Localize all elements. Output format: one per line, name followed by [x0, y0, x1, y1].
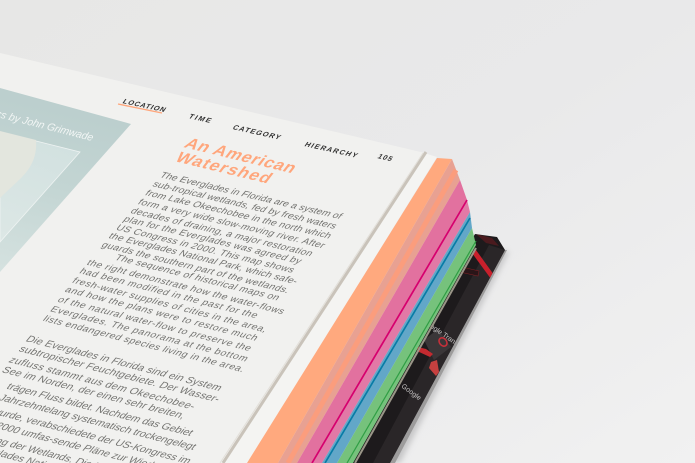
second book underneath with black cover [340, 234, 509, 463]
nav: hierarchy: HIERARCHY [303, 140, 360, 159]
heading: Watershed [172, 149, 276, 187]
English body text: the right demonstrate how the water-flows [84, 258, 287, 317]
page edges stack with colour bands [223, 153, 476, 463]
German body text: Die Everglades in Florida sind ein System [23, 334, 225, 393]
English body text: US Congress in 2000. This map shows [113, 223, 297, 275]
cover label: Google: Google [400, 383, 422, 402]
English body text: sub-tropical wetlands, fed by fresh waters [150, 180, 339, 231]
heading: An American [181, 135, 301, 176]
icon: dark tile with red shapes [417, 329, 451, 376]
German body text [0, 334, 225, 463]
English body text: had been modified in the past for the [77, 267, 261, 321]
map land area [0, 131, 36, 198]
book photo scene [0, 88, 510, 463]
navigation header [118, 97, 395, 163]
English body text: The sequence of historical maps on [112, 253, 282, 303]
German body text: Jahrzehntelang systematisch trockengelegt [0, 393, 199, 452]
English body text: lists endangered species living in the area. [40, 314, 247, 374]
page gutter edge [220, 152, 426, 463]
English body text: fresh-water supplies of cities in the area, [69, 276, 270, 335]
open book page [0, 53, 425, 463]
icon: small cover label box [460, 267, 479, 276]
page number: 105 [376, 152, 395, 163]
German body text: zufluss stammt aus dem Okeechobee- [6, 355, 199, 412]
English body text: form a very wide slow-moving river. After [135, 198, 328, 251]
nav: time: TIME [187, 112, 214, 125]
English body text: from Lake Okeechobee in the north which [142, 189, 334, 241]
English body text: decades of draining, a major restoration [128, 207, 315, 259]
nav: location underline [118, 104, 162, 113]
map panel [0, 88, 131, 272]
English body text: and how the plans were to restore much [62, 285, 260, 343]
English body text: plan for the Everglades was agreed by [121, 215, 304, 266]
map inset [0, 132, 80, 242]
nav: category: CATEGORY [231, 123, 283, 141]
English body text [40, 171, 345, 374]
nav: location: LOCATION [121, 97, 168, 114]
English body text: of the natural water-flow to preserve the [55, 295, 254, 353]
English body text: Everglades. The panorama at the bottom [48, 305, 251, 364]
German body text: See im Norden, der einen sehr breiten, [0, 365, 188, 421]
German body text: trägen Fluss bildet. Nachdem das Gebiet [4, 381, 196, 438]
cover label: Google Trans: Google Trans [421, 318, 460, 348]
icon: red stripe on cover [472, 250, 492, 278]
German body text: subtropischer Feuchtgebiete. Der Wasser- [16, 344, 223, 405]
English body text: the Everglades National Park, which safe- [106, 232, 300, 286]
English body text: guards the southern part of the wetlands. [99, 240, 292, 295]
English body text: The Everglades in Florida are a system of [157, 171, 345, 221]
